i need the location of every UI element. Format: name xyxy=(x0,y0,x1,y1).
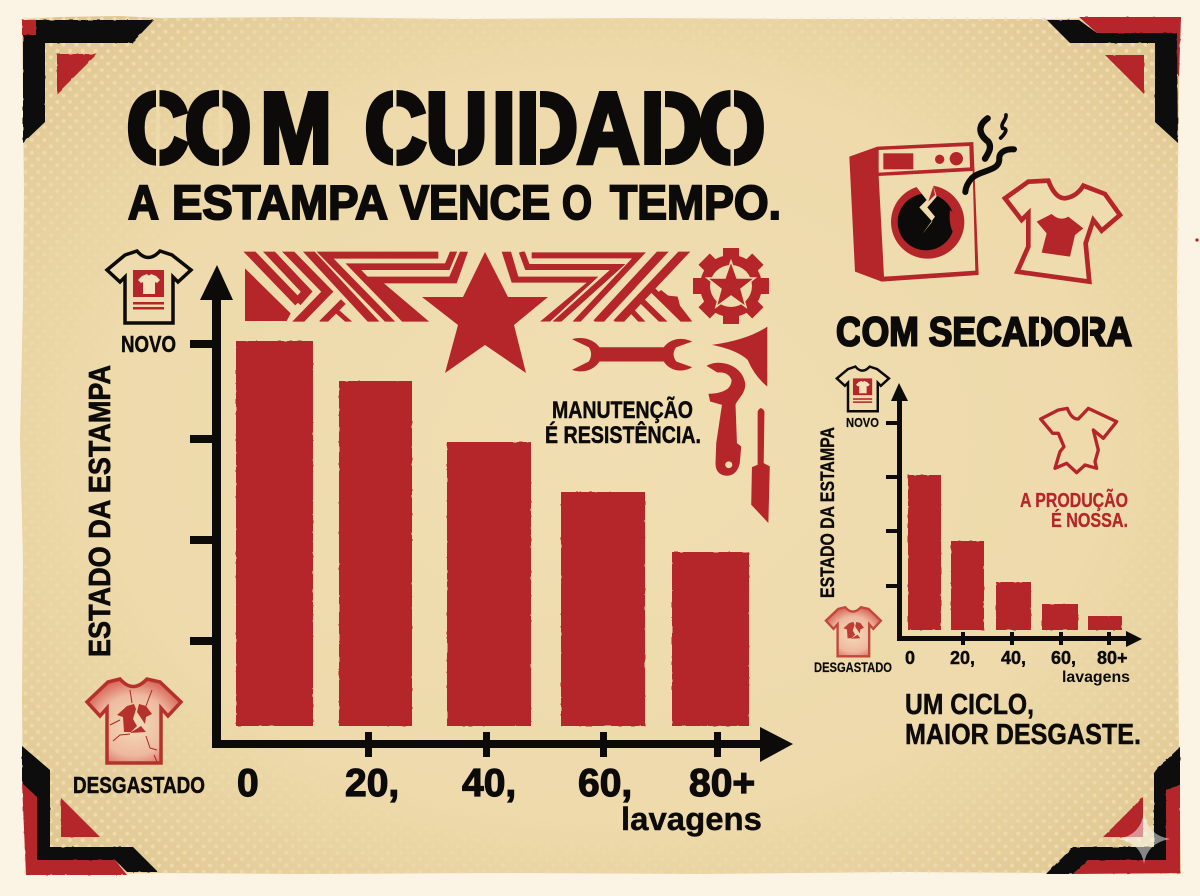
main x labels: 80+ xyxy=(689,762,755,805)
caption: a produção é nossa xyxy=(1020,489,1128,532)
icon: worn shirt xyxy=(87,679,181,763)
y axis title: ESTADO DA ESTAMPA xyxy=(82,365,117,657)
caption: um ciclo maior desgaste xyxy=(905,689,1141,751)
icon: wrench xyxy=(572,338,692,371)
main x labels: 0 xyxy=(237,762,259,805)
main chart xyxy=(82,265,793,837)
subtitle: A xyxy=(128,177,159,230)
left chevrons xyxy=(243,252,468,322)
icon: new shirt xyxy=(107,251,191,323)
main axes and ticks xyxy=(190,265,793,762)
small x labels xyxy=(905,648,1128,668)
icon: hook spanner xyxy=(707,363,745,476)
icon: leather shirt outline xyxy=(1041,408,1117,473)
icon: corner ornament xyxy=(712,327,767,387)
small x labels: 80+ xyxy=(1097,648,1128,668)
caption: manutenção xyxy=(545,396,701,449)
corner: bottom left xyxy=(22,746,158,875)
main x labels: 40, xyxy=(462,762,516,805)
washer body xyxy=(849,142,979,282)
icon: small new shirt xyxy=(837,367,889,411)
icon: broken washing machine xyxy=(849,115,1014,282)
subtitle: O xyxy=(562,177,592,230)
icon: screwdriver xyxy=(751,408,770,523)
small x labels: 0 xyxy=(905,648,915,668)
caption: manutenção: É RESISTÊNCIA. xyxy=(545,421,701,449)
washer door xyxy=(891,185,964,259)
corner: top left xyxy=(22,20,154,143)
subtitle: VENCE xyxy=(400,177,550,230)
caption: a produção é nossa: A PRODUÇÃO xyxy=(1020,489,1128,512)
caption: manutenção: MANUTENÇÃO xyxy=(552,396,693,424)
main x labels: 60, xyxy=(578,762,632,805)
small unit label: lavagens xyxy=(1062,669,1130,686)
smoke xyxy=(965,115,1014,192)
caption: a produção é nossa: É NOSSA. xyxy=(1051,509,1128,532)
star and chevron banner xyxy=(244,246,692,373)
icon: gear with star xyxy=(693,248,769,324)
heading: com secadora: COM SECADORA xyxy=(836,308,1132,354)
title: COM CUIDADO xyxy=(127,72,765,184)
label: novo: NOVO xyxy=(121,331,176,357)
small chart xyxy=(818,383,1142,686)
unit label: lavagens xyxy=(621,801,762,837)
main bars xyxy=(236,341,749,726)
main x labels xyxy=(237,762,755,805)
corner sparkle mark xyxy=(1118,812,1170,864)
caption: um ciclo maior desgaste: UM CICLO, xyxy=(905,689,1034,721)
small x labels: 20, xyxy=(950,648,975,668)
small axes and ticks xyxy=(886,383,1142,647)
icon: tools xyxy=(572,327,770,523)
icon: distorted shirt xyxy=(1005,181,1120,282)
subtitle: TEMPO. xyxy=(610,177,781,230)
icon: small worn shirt xyxy=(826,607,881,656)
central star xyxy=(422,252,548,373)
subtitle: ESTAMPA xyxy=(172,177,388,230)
main x labels: 20, xyxy=(345,762,399,805)
label: small novo: NOVO xyxy=(846,416,879,430)
small bars xyxy=(908,475,1122,630)
small y axis title: ESTADO DA ESTAMPA xyxy=(818,427,839,598)
small x labels: 60, xyxy=(1051,648,1076,668)
caption: um ciclo maior desgaste: MAIOR DESGASTE. xyxy=(905,719,1141,751)
right chevrons xyxy=(502,252,692,322)
corner: bottom right xyxy=(1046,747,1180,874)
small x labels: 40, xyxy=(1001,648,1026,668)
label: desgastado: DESGASTADO xyxy=(73,772,205,798)
subtitle xyxy=(128,177,781,230)
corner: top right xyxy=(1047,17,1181,143)
label: small desgastado: DESGASTADO xyxy=(814,660,892,675)
